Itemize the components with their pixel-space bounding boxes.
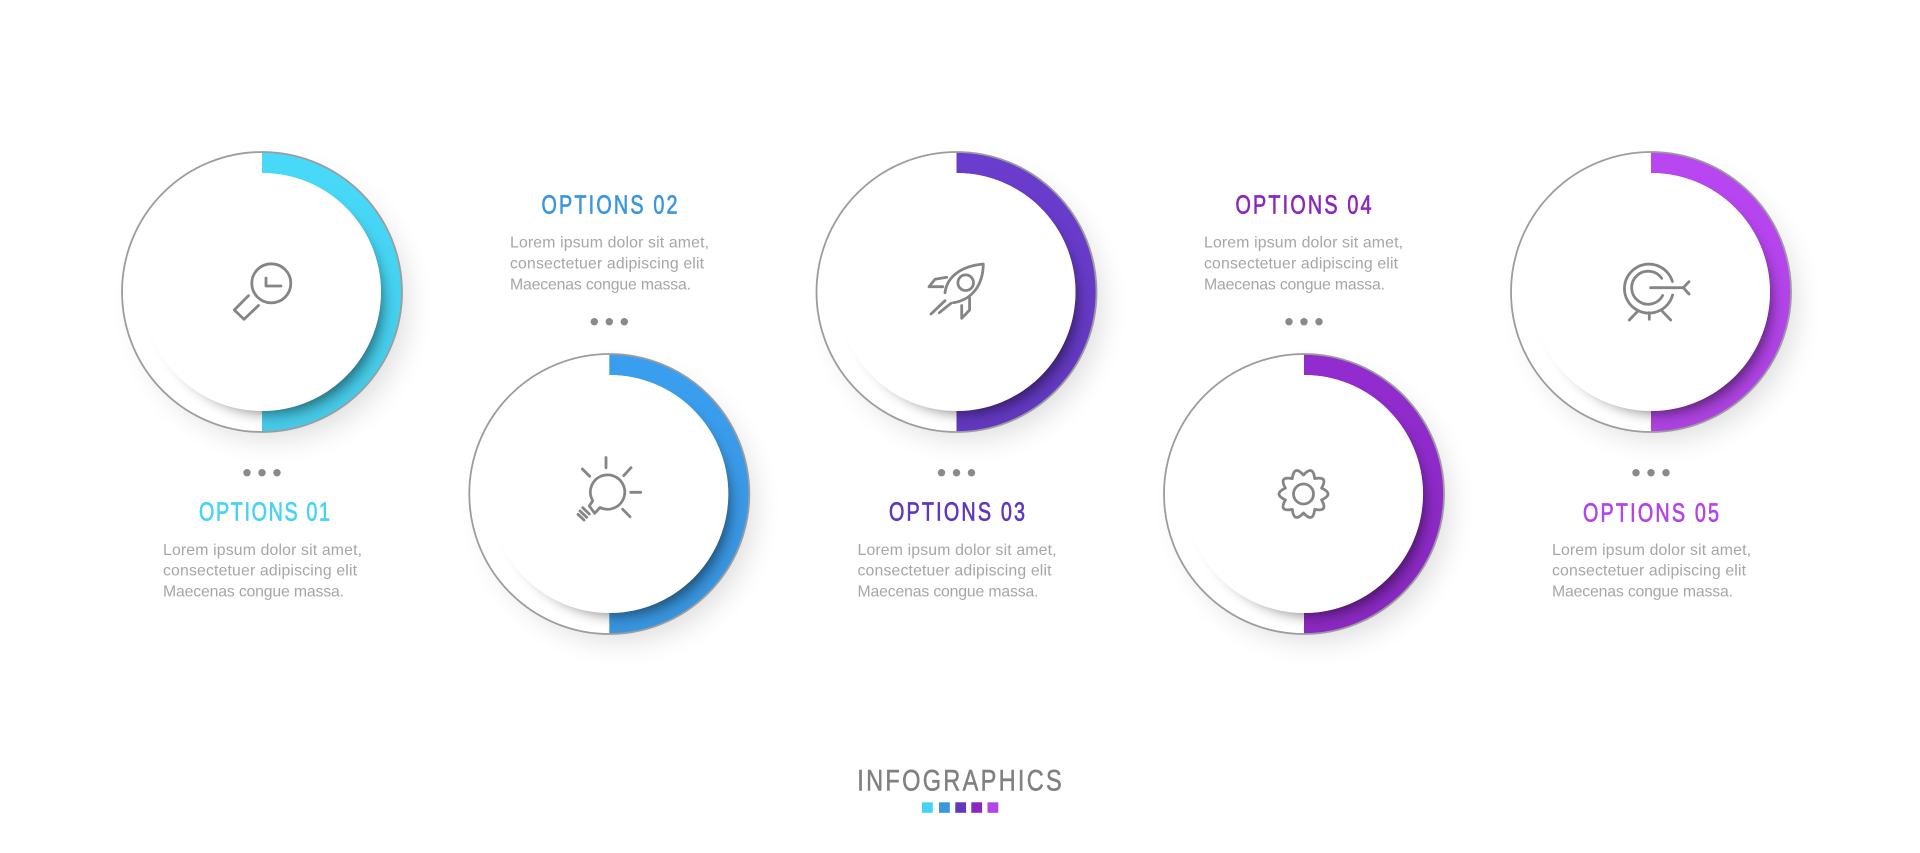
text: options 02 description: Maecenas congue massa. (510, 276, 691, 293)
text: options 02 description: consectetuer adipiscing elit (510, 256, 705, 272)
text: options 05 description (1552, 542, 1751, 601)
dots: step 4 (1285, 318, 1323, 325)
text: options 01 description: Maecenas congue massa. (163, 584, 344, 601)
text: options 04 description: consectetuer adipiscing elit (1204, 256, 1399, 272)
step 4: circle (1164, 354, 1449, 641)
dots: step 5 (1632, 469, 1670, 476)
text: options 04 description: Lorem ipsum dolor sit amet, (1204, 235, 1403, 252)
dots: step 1 (243, 469, 281, 476)
text: options 04 description (1204, 235, 1403, 293)
text: options 03 description: Lorem ipsum dolor sit amet, (858, 542, 1056, 559)
text: options 05 description: consectetuer adipiscing elit (1552, 563, 1747, 580)
text: options 05 description: Lorem ipsum dolor sit amet, (1552, 542, 1751, 559)
dots: step 2 (591, 318, 628, 325)
heading: options 04: OPTIONS 04 (1236, 190, 1372, 219)
text: options 02 description: Lorem ipsum dolor sit amet, (510, 235, 709, 252)
step 5: circle (1511, 152, 1796, 439)
text: options 03 description: consectetuer adipiscing elit (858, 563, 1052, 580)
heading: options 01: OPTIONS 01 (199, 497, 330, 526)
text: options 01 description (163, 542, 362, 601)
icon: target with arrow (1624, 264, 1689, 320)
heading: options 03: OPTIONS 03 (889, 497, 1025, 526)
text: options 02 description (510, 235, 709, 293)
text: options 04 description: Maecenas congue massa. (1204, 276, 1385, 293)
text: options 01 description: consectetuer adipiscing elit (163, 563, 358, 580)
footer title: INFOGRAPHICS (857, 764, 1062, 797)
text: options 05 description: Maecenas congue massa. (1552, 584, 1733, 601)
step 1: circle (122, 152, 407, 439)
step 3: circle (816, 152, 1102, 439)
heading: options 02: OPTIONS 02 (542, 190, 678, 219)
heading: options 05: OPTIONS 05 (1583, 498, 1719, 527)
dots: step 3 (938, 469, 975, 476)
text: options 03 description: Maecenas congue massa. (858, 584, 1038, 601)
text: options 03 description (858, 542, 1056, 601)
icon: light bulb (578, 458, 641, 520)
icon: magnifier with clock (234, 264, 291, 319)
text: options 01 description: Lorem ipsum dolor sit amet, (163, 542, 362, 559)
icon: gear (1279, 471, 1328, 517)
step 2: circle (469, 354, 754, 641)
colour legend squares (922, 802, 998, 813)
icon: rocket (929, 264, 983, 318)
